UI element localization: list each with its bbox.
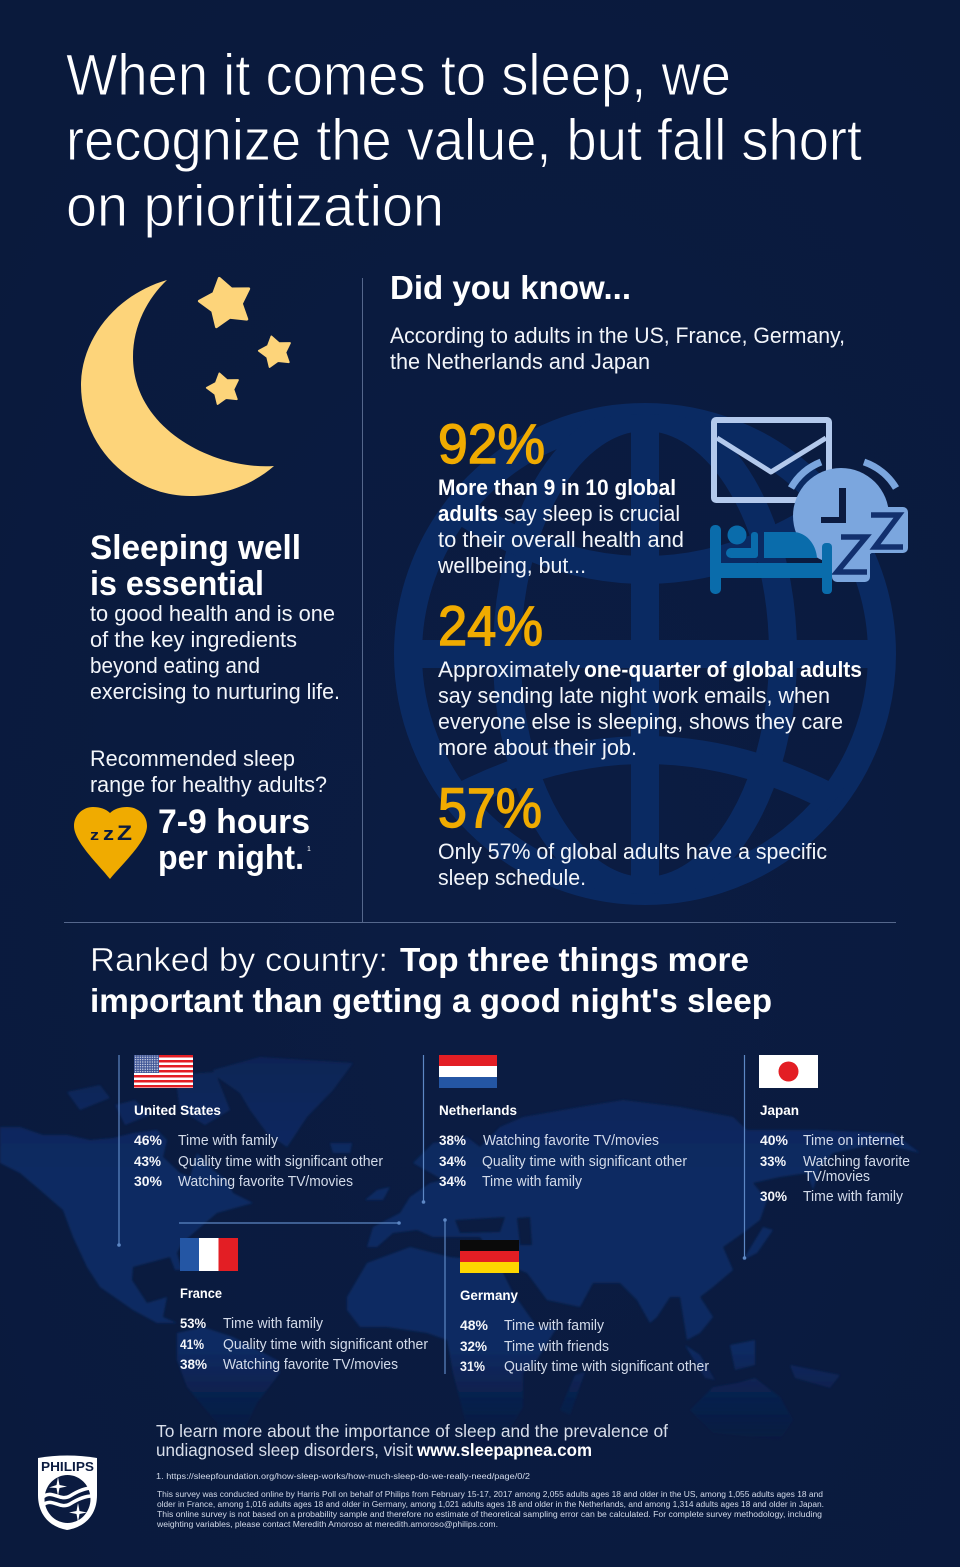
panel: France: Quality time with significant other [223,1337,428,1353]
heading: did you know: the Netherlands and Japan [390,349,650,374]
panel: Netherlands: 38% [439,1132,467,1148]
stat: 24%: say sending late night work emails, when [438,683,830,708]
footnotes and survey method: weighting variables, please contact Meredith Amoroso at meredith.amoroso@philips.com. [156,1520,498,1529]
text block: 7-9 hours per night [158,803,311,877]
title: recognize the value, but fall short [66,108,862,173]
panel: United States: Watching favorite TV/movies [178,1174,353,1190]
panel: Netherlands: 34% [439,1173,467,1189]
divider [64,278,896,922]
panel: Netherlands: Quality time with significant other [482,1154,687,1170]
heading: ranked by country: Ranked by country: [90,941,388,978]
title: on prioritization [66,174,444,239]
title: When it comes to sleep, we [66,43,731,108]
text block: sleeping well is essential: Sleeping well [90,529,301,567]
stat: 24%: Approximately [438,657,580,682]
text block: 7-9 hours per night: 1 [307,846,311,853]
panel: Japan: 33% [760,1153,787,1169]
footnotes and survey method: This survey was conducted online by Harris Poll on behalf of Philips from February 15-17, 2017 among 2,055 adults ages 18 and older in the US, among 1,055 adults ages 18 and [157,1490,823,1499]
stat: 57% [438,776,827,890]
heading: ranked by country [90,941,772,1019]
stat: 92%: More than 9 in 10 global [438,475,676,500]
icon: heart with zzz: Z [117,822,132,845]
panel: Germany: 48% [460,1317,489,1333]
panel: United States: 43% [134,1153,162,1169]
panel: Japan: Watching favorite [803,1154,910,1170]
Philips shield logo [38,1456,97,1530]
panel: United States [117,1055,383,1247]
icon: crescent moon and stars [81,278,290,496]
stat: 92%: 92% [438,412,545,475]
Philips shield logo: PHILIPS [41,1459,94,1474]
panel: United States: Time with family [178,1133,279,1149]
heading: did you know: Did you know... [390,269,631,306]
panel: France: Time with family [223,1316,324,1332]
heading: ranked by country: important than getting a good night's sleep [90,982,772,1019]
panel: Japan: 40% [760,1132,789,1148]
panel: Germany: Time with friends [504,1339,609,1355]
heading: did you know: According to adults in the US, France, Germany, [390,323,845,348]
stat: 57%: Only 57% of global adults have a specific [438,839,827,864]
text block: sleeping well is essential [90,529,340,704]
footer call to action: To learn more about the importance of sleep and the prevalence of [156,1421,668,1441]
panel: France: Watching favorite TV/movies [223,1357,398,1373]
panel: Japan: TV/movies [804,1169,870,1185]
panel: Netherlands: Time with family [482,1174,583,1190]
footnotes and survey method [156,1472,824,1529]
panel: Netherlands: 34% [439,1153,467,1169]
text block: recommended sleep range [90,746,327,797]
heading: did you know [390,269,845,374]
stat: 92%: say sleep is crucial [504,501,680,526]
text block: sleeping well is essential: of the key ingredients [90,627,297,652]
panel: France [179,1221,428,1373]
panel: United States: Quality time with significant other [178,1154,383,1170]
stat: 92%: to their overall health and [438,527,684,552]
panel: Germany [443,1218,709,1375]
icon: heart with zzz: z [103,824,114,844]
panel: Germany: Quality time with significant other [504,1359,709,1375]
panel: Netherlands [422,1055,687,1204]
world map background [0,1057,920,1473]
text block: sleeping well is essential: is essential [90,565,264,603]
flag: Japan [759,1055,818,1088]
stat: 24%: one-quarter of global adults [584,657,862,682]
icon: heart with zzz [74,807,147,879]
panel: Japan: Time on internet [803,1133,904,1149]
flag: France [180,1238,238,1271]
flag: United States [134,1055,193,1088]
text block: recommended sleep range: range for healthy adults? [90,772,327,797]
footnotes and survey method: 1. https://sleepfoundation.org/how-sleep-works/how-much-sleep-do-we-really-need/page/0/2 [156,1472,531,1481]
panel: Japan: 30% [760,1188,788,1204]
panel: Germany: 32% [460,1338,488,1354]
panel: France: 38% [180,1356,208,1372]
flag: Netherlands [439,1055,497,1088]
panel: Germany: 31% [460,1358,485,1374]
text block: sleeping well is essential: to good health and is one [90,601,335,626]
panel: United States: 46% [134,1132,163,1148]
stat: 92%: wellbeing, but... [437,553,586,578]
stat: 24%: more about their job. [438,735,637,760]
icon: heart with zzz: z [90,827,99,844]
stat: 57%: sleep schedule. [438,865,586,890]
stat: 24% [438,594,862,760]
panel: Germany: Time with family [504,1318,605,1334]
panel: Netherlands: Netherlands [439,1102,517,1118]
panel: Japan: Time with family [803,1189,904,1205]
panel: United States: 30% [134,1173,163,1189]
flag: Germany [460,1240,519,1273]
panel: Germany: Germany [460,1287,518,1303]
text block: sleeping well is essential: beyond eating and [90,653,260,678]
icon: alarm clock with zzz [791,462,908,582]
stat: 24%: 24% [438,594,543,657]
stat: 24%: everyone else is sleeping, shows they care [438,709,843,734]
footer call to action: www.sleepapnea.com [416,1440,592,1460]
panel: France: France [180,1285,222,1301]
footer call to action [156,1421,668,1460]
text block: recommended sleep range: Recommended sleep [90,746,295,771]
stat: 57%: 57% [438,776,542,839]
icon: person in bed [710,525,832,594]
text block: 7-9 hours per night: 7-9 hours [158,803,310,841]
icon: envelope [714,420,829,500]
panel: United States: United States [134,1102,221,1118]
text block: 7-9 hours per night: per night. [158,839,304,877]
footer call to action: undiagnosed sleep disorders, visit [156,1440,413,1460]
globe background graphic [400,410,890,900]
panel: France: 41% [180,1336,204,1352]
panel: France: 53% [180,1315,207,1331]
stat: 92% [437,412,684,578]
panel: Japan: Japan [760,1102,799,1118]
footnotes and survey method: older in France, among 1,016 adults ages 18 and older in Germany, among 1,021 adults ages 18 and older in the Netherlands, and among 1,314 adults ages 18 and older in Japan. [157,1500,824,1509]
panel: Japan [743,1055,910,1260]
title [66,43,862,239]
panel: Netherlands: Watching favorite TV/movies [483,1133,659,1149]
stat: 92%: adults [438,501,498,526]
text block: sleeping well is essential: exercising to nurturing life. [90,679,340,704]
heading: ranked by country: Top three things more [400,941,749,978]
footnotes and survey method: This online survey is not based on a probability sample and therefore no estimate of theoretical sampling error can be calculated. For complete survey methodology, including [157,1510,822,1519]
